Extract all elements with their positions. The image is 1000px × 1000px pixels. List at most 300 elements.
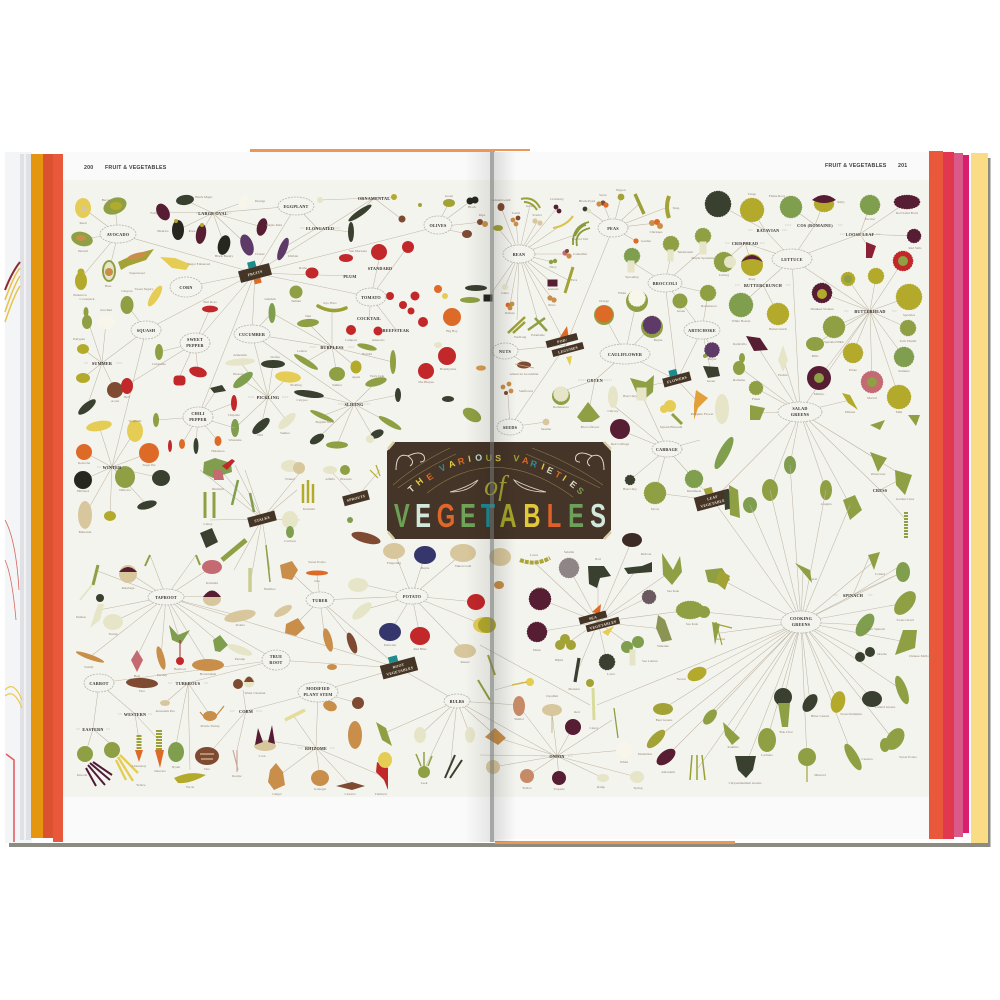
cluster: lettuce: [706, 192, 922, 414]
cluster: carrot and tuberous: Prairie Turnip: [201, 724, 220, 728]
cluster: cooking greens: GREENS: [792, 622, 811, 627]
cluster: squash: WINTER: [103, 465, 122, 470]
cluster: cucumber: Saki: [305, 314, 311, 318]
cluster: beans and peas: Anasazi: [548, 287, 559, 291]
banner: leaf vegetables: VEGETABLES: [700, 498, 728, 509]
cluster: salad greens: Endive: [778, 373, 788, 377]
cluster: flowers and cabbage: Savoy: [651, 507, 660, 511]
cluster: bulbs and onion: Spring: [633, 786, 643, 790]
cluster: flowers and cabbage: Broccoflower: [581, 425, 600, 429]
cluster: ornamental and olives: Ripe: [479, 213, 486, 217]
cluster: lettuce: Bibb: [812, 354, 819, 358]
left fore-edge pages: [5, 152, 32, 843]
cluster: cooking greens: Sweet Potato: [899, 755, 917, 759]
cluster: cucumber: Sumter: [280, 431, 291, 435]
cluster: ornamental and olives: ORNAMENTAL: [358, 196, 390, 201]
cluster: cucumber: Wautoma: [229, 438, 242, 442]
cluster: avocado: [70, 194, 136, 297]
cluster: tuber and potato: [272, 529, 495, 670]
cluster: lettuce: Buttercrunch: [769, 327, 787, 331]
cluster: corm and rhizome: Corn: [259, 754, 266, 758]
cluster: flowers and cabbage: Pumpkin Flower: [691, 412, 714, 416]
cluster: taproot: Rutabaga: [122, 586, 135, 590]
cluster: carrot and tuberous: [76, 650, 290, 789]
right page: [495, 152, 929, 839]
cluster: cucumber: PICKLING: [257, 395, 280, 400]
cluster: tomato: The Burpee: [418, 380, 434, 384]
cluster: tuber and potato: Peruvian: [384, 643, 396, 647]
cluster: nuts and seeds: [442, 285, 552, 435]
cluster: squash: Hubbard: [77, 489, 89, 493]
cluster: bulbs and onion: [376, 655, 644, 791]
main connector lines: roots, tubers, stalks: [93, 465, 590, 757]
cluster: broccoli, artichoke, cauliflower: [578, 229, 720, 383]
cluster: tomato: [299, 241, 461, 384]
cluster: broccoli, artichoke, cauliflower: CAULIFLOWER: [608, 352, 643, 357]
banner: root vegetables: [378, 651, 418, 679]
cluster: bulbs and onion: Shallot: [514, 717, 524, 721]
cluster: broccoli, artichoke, cauliflower: Sprouting: [625, 275, 639, 279]
cluster: cucumber: Gherkin: [264, 297, 276, 301]
cluster: taproot: Salsify: [84, 665, 94, 669]
title: vegetables: V: [394, 498, 410, 535]
cluster: beans and peas: [484, 188, 680, 339]
cluster: salad greens: SALAD: [792, 406, 808, 411]
cluster: cucumber: Sumter: [332, 383, 343, 387]
cluster: cooking greens: Bok Choi: [779, 730, 793, 734]
cluster: sea vegetables: Sea Kale: [667, 589, 680, 593]
cluster: squash: SUMMER: [92, 361, 113, 366]
cluster: avocado: Bacon: [102, 198, 111, 202]
cluster: bulbs and onion: ONION: [549, 754, 565, 759]
cluster: cooking greens: Sweet Pumpkin: [840, 712, 862, 716]
cluster: carrot and tuberous: Nyam: [172, 765, 181, 769]
cluster: corm and rhizome: Water Chestnut: [245, 691, 266, 695]
cluster: tuber and potato: Red Bliss: [413, 647, 427, 651]
title corner flourishes: [396, 453, 604, 492]
left page: [63, 152, 495, 842]
cluster: cooking greens: COOKING: [790, 616, 813, 621]
cluster: corm and rhizome: Konjac: [232, 774, 242, 778]
cluster: tomato: San Marzano: [349, 249, 367, 253]
cluster: nuts and seeds: SEEDS: [503, 425, 518, 430]
cluster: cucumber: [225, 286, 403, 449]
title: vegetables: E: [415, 498, 431, 535]
cluster: salad greens: GREENS: [791, 412, 810, 417]
title: the various varieties: T: [406, 483, 417, 494]
cluster: cooking greens: Collard Greens: [875, 705, 896, 709]
cluster: taproot: Horseradish: [200, 672, 216, 676]
title: vegetables: G: [437, 498, 455, 535]
banner: pod legumes: LEGUMES: [558, 346, 578, 355]
cluster: stalks: Kohlrabi: [303, 507, 315, 511]
title: the various varieties: A: [447, 458, 457, 470]
cluster: cucumber: SLICING: [344, 402, 364, 407]
cluster: cucumber: English Slicer: [315, 420, 335, 424]
cluster: sea vegetables: Laver: [607, 672, 616, 676]
cluster: corn: CORN: [179, 285, 193, 290]
title: vegetables: E: [460, 498, 476, 535]
cluster: peppers: [121, 300, 240, 454]
cluster: stalks: Rhubarb: [212, 487, 224, 491]
cluster: ornamental and olives: OLIVES: [429, 223, 447, 228]
cluster: taproot: Daikon: [76, 615, 86, 619]
cluster: sea vegetables: Laver: [530, 553, 539, 557]
cluster: tuber and potato: Fingerling: [387, 561, 401, 565]
cluster: stalks: Cardoon: [284, 539, 296, 543]
cluster: tuber and potato: Oca: [314, 579, 320, 583]
cluster: lettuce: Speckled Bibb: [824, 340, 844, 344]
cluster: corn: Sugar Enhanced: [188, 262, 210, 266]
cluster: corn: Supersweet: [129, 271, 145, 275]
cluster: carrot and tuberous: Jerusalem Pea: [155, 709, 175, 713]
cluster: corm and rhizome: MODIFIED: [306, 686, 330, 691]
cluster: eggplant: EGGPLANT: [283, 204, 309, 209]
cluster: bulbs and onion: Red: [574, 710, 580, 714]
cluster: taproot: Beetroot: [174, 667, 186, 671]
cluster: sea vegetables: Mozuku: [568, 687, 580, 691]
decorative arcs: [393, 448, 603, 497]
cluster: cucumber: Calypso: [296, 398, 308, 402]
cluster: eggplant: Purple Rain: [266, 223, 282, 227]
cluster: tomato: Brandywine: [440, 367, 457, 371]
cluster: cooking greens: Mustard: [814, 773, 826, 777]
cluster: lettuce: BUTTERHEAD: [854, 309, 886, 314]
cluster: lettuce: CRISPHEAD: [732, 241, 758, 246]
cluster: squash: Zucchini: [100, 308, 112, 312]
banner: pod legumes: [546, 326, 584, 366]
cluster: sea vegetables: Nori: [595, 557, 601, 561]
cluster: avocado: Reed: [80, 221, 87, 225]
title: the various varieties: E: [545, 465, 555, 476]
cluster: lettuce: LETTUCE: [781, 257, 803, 262]
cluster: lettuce: Drunken Woman: [810, 307, 834, 311]
cluster: cooking greens: Amaranth: [661, 770, 675, 774]
banner: flowers: [661, 366, 692, 387]
cluster: lettuce: BUTTERCRUNCH: [744, 283, 783, 288]
cluster: lettuce: Escolar: [865, 217, 876, 221]
cluster: lettuce: Pirate: [849, 368, 857, 372]
cluster: carrot and tuberous: Kuroda: [77, 773, 88, 777]
cluster: cucumber: Dill: [257, 433, 263, 437]
cluster: lettuce: Summer: [898, 369, 911, 373]
cluster: beans and peas: Garden: [641, 239, 651, 243]
cluster: sprouts: Alfalfa: [325, 477, 335, 481]
banner: root vegetables: ROOT: [392, 663, 405, 670]
cluster: eggplant: Ichiban: [288, 254, 298, 258]
cluster: lettuce: White Boston: [732, 319, 751, 323]
cluster: stalks: Celery: [203, 522, 213, 526]
cluster: squash: Pattypan: [73, 337, 85, 341]
cluster: taproot: Parsnip: [235, 657, 245, 661]
cluster: bulbs and onion: Yellow: [522, 786, 532, 790]
cluster: corm and rhizome: Taro: [204, 767, 210, 771]
cluster: broccoli, artichoke, cauliflower: Tenderstem: [677, 250, 693, 254]
cluster: nuts and seeds: NUTS: [499, 349, 511, 354]
cluster: squash: Acorn: [111, 399, 120, 403]
cluster: broccoli, artichoke, cauliflower: White: [618, 291, 627, 295]
cluster: cooking greens: Kokihia: [728, 745, 739, 749]
cluster: beans and peas: Fava: [571, 278, 578, 282]
cluster: corm and rhizome: Turmeric: [375, 792, 388, 796]
cluster: tuber and potato: Sweet Potato: [308, 560, 326, 564]
title: vegetables: T: [481, 498, 496, 535]
title: vegetables: L: [547, 498, 561, 535]
cluster: carrot and tuberous: TUBEROUS: [176, 681, 201, 686]
cluster: beans and peas: Black-Eyed: [579, 199, 595, 203]
cluster: cooking greens: Sorrel: [809, 577, 817, 581]
cluster: eggplant: Dourga: [255, 199, 266, 203]
right coloured edge bands: [929, 151, 988, 843]
title: the various varieties: S: [495, 453, 501, 463]
cluster: beans and peas: Yardlong: [514, 335, 527, 339]
main connector lines: legumes, flowers, greens: [505, 225, 880, 705]
cluster: tuber and potato: POTATO: [403, 594, 422, 599]
banner: sprouts: [342, 490, 370, 506]
cluster: ornamental and olives: [317, 194, 488, 238]
cluster: carrot and tuberous: CARROT: [89, 681, 109, 686]
cluster: bulbs and onion: Celery: [589, 726, 599, 730]
title: the various varieties: A: [521, 455, 530, 466]
cluster: beans and peas: Haricot Vert: [572, 237, 588, 241]
cluster: corn: Sweet Sugary: [135, 287, 154, 291]
cluster: nuts and seeds: Sunflower: [519, 389, 534, 393]
cluster: tomato: STANDARD: [368, 266, 392, 271]
cluster: flowers and cabbage: Bok Choy: [623, 487, 637, 491]
title: the various varieties: I: [467, 454, 472, 464]
cluster: corm and rhizome: Cassava: [344, 792, 356, 796]
cluster: cooking greens: Water Spinach: [865, 627, 885, 631]
cluster: beans and peas: Lentil: [512, 211, 520, 215]
cluster: salad greens: CRESS: [873, 488, 888, 493]
title: the various varieties: I: [540, 461, 546, 472]
title: vegetables: E: [568, 498, 584, 535]
cluster: avocado: Hass: [105, 284, 112, 288]
cluster: squash: [73, 289, 170, 534]
cluster: cooking greens: [638, 465, 932, 785]
cluster: eggplant: [150, 194, 354, 262]
cluster: bulbs and onion: White: [620, 760, 629, 764]
cluster: lettuce: Rosy: [749, 277, 756, 281]
cluster: tomato: BEEFSTEAK: [383, 328, 410, 333]
cluster: peppers: PEPPER: [189, 417, 208, 422]
cluster: eggplant: Black Beauty: [215, 254, 233, 258]
cluster: fruits banner: FRUITS: [247, 270, 263, 277]
cluster: lettuce: Red Sails: [909, 246, 922, 250]
cluster: cooking greens: Bitter Greens: [811, 714, 830, 718]
cluster: tomato: Amaretto: [372, 338, 385, 342]
cluster: beans and peas: PEAS: [607, 226, 619, 231]
cluster: fruits banner: [236, 257, 273, 288]
cluster: beans and peas: BEAN: [513, 252, 525, 257]
cluster: beans and peas: Snow: [599, 193, 607, 197]
cluster: tuber and potato: TUBER: [312, 598, 328, 603]
cluster: squash: Butternut: [79, 530, 91, 534]
cluster: ornamental and olives: Black: [468, 205, 476, 209]
cluster: corm and rhizome: CORM: [239, 709, 253, 714]
cluster: peppers: SWEET: [187, 337, 203, 342]
cluster: tomato: COCKTAIL: [357, 316, 381, 321]
panel: title plaque: [387, 442, 611, 539]
cluster: broccoli, artichoke, cauliflower: ARTICHOKE: [688, 328, 716, 333]
cluster: cucumber: Vertina: [270, 355, 280, 359]
cluster: carrot and tuberous: Taro: [139, 689, 145, 693]
title: vegetables: A: [499, 498, 517, 535]
title: the various varieties: R: [457, 455, 466, 467]
cluster: eggplant: LARGE OVAL: [198, 211, 228, 216]
cluster: carrot and tuberous: WESTERN: [124, 712, 146, 717]
cluster: eggplant: ELONGATED: [306, 226, 334, 231]
cluster: lettuce: Flame Rosy: [769, 194, 785, 198]
banner: root vegetables: VEGETABLES: [386, 666, 414, 677]
page header right: 201: [898, 163, 907, 169]
cluster: squash: Crookneck: [80, 297, 95, 301]
cluster: tomato: Roma: [299, 266, 308, 270]
cluster: lettuce: Tango: [748, 192, 757, 196]
cluster: cooking greens: Beet Greens: [656, 718, 673, 722]
title: the various varieties: V: [513, 453, 520, 464]
cluster: beans and peas: Edamame: [531, 333, 545, 337]
title: of: of: [484, 471, 509, 502]
cluster: taproot: Parsley: [157, 673, 167, 677]
cluster: cucumber: Pickling: [290, 383, 302, 387]
cluster: beans and peas: Adzuki Lentil: [492, 198, 511, 202]
title: the various varieties: I: [561, 473, 568, 483]
cluster: beans and peas: Pigeon: [616, 188, 626, 192]
cluster: cooking greens: Cassava: [861, 757, 873, 761]
cluster: sea vegetables: Ricbote: [641, 552, 652, 556]
cluster: lettuce: LOOSE LEAF: [846, 232, 875, 237]
cluster: sprouts: Brussels: [340, 477, 352, 481]
cluster: sea vegetables: Sea Lettuce: [642, 659, 658, 663]
cluster: lettuce: Iceberg: [719, 273, 729, 277]
cluster: cooking greens: Chrysanthemum Greens: [729, 781, 762, 785]
title: the various varieties: E: [425, 471, 435, 483]
cluster: cucumber: Armenian: [233, 353, 247, 357]
title: the various varieties: V: [438, 462, 447, 474]
cluster: peppers: Bell Rosa: [203, 300, 217, 304]
cluster: cooking greens: Chinese Mallow: [909, 654, 932, 658]
cluster: flowers and cabbage: Drumhead: [687, 489, 701, 493]
cluster: broccoli, artichoke, cauliflower: Purple Sprouting: [691, 256, 715, 260]
cluster: tuber and potato: Purple: [421, 566, 430, 570]
cluster: broccoli, artichoke, cauliflower: Green: [677, 309, 685, 313]
cluster: bulbs and onion: BULBS: [450, 699, 465, 704]
cluster: cucumber: Lemon: [297, 349, 307, 353]
cluster: cooking greens: Orache: [877, 652, 887, 656]
cluster: corm and rhizome: [195, 676, 388, 796]
cluster: cucumber: BURPLESS: [320, 345, 344, 350]
cluster: beans and peas: Cranberry: [550, 197, 564, 201]
cluster: tomato: Campari: [345, 338, 357, 342]
cluster: beans and peas: Scarlet: [532, 213, 542, 217]
cluster: nuts and seeds: American Groundnut: [510, 372, 539, 376]
cluster: beans and peas: Snap: [673, 206, 680, 210]
cluster: flowers and cabbage: CABBAGE: [656, 447, 678, 452]
left coloured edge bands: [31, 154, 64, 842]
cluster: bulbs and onion: Ramp: [597, 785, 605, 789]
cluster: cooking greens: Dandelion: [638, 752, 652, 756]
cluster: eggplant: Fairy: [150, 211, 158, 215]
cluster: broccoli, artichoke, cauliflower: Orange: [599, 299, 609, 303]
cluster: squash: Delicata: [119, 488, 131, 492]
cluster: peppers: CHILI: [191, 411, 205, 416]
cluster: corm and rhizome: Ginger: [272, 792, 283, 796]
cluster: flowers and cabbage: Bok Choy: [623, 394, 637, 398]
cluster: sea vegetables: Wakame: [657, 644, 669, 648]
cluster: peppers: Habanero: [211, 449, 225, 453]
cluster: broccoli, artichoke, cauliflower: Green: [707, 379, 715, 383]
cluster: flowers and cabbage: Chicory: [608, 409, 619, 413]
cluster: flowers and cabbage: Squash Blossom: [660, 425, 683, 429]
cluster: cooking greens: Sarepta: [715, 637, 726, 641]
banner: leaf vegetables: [692, 483, 732, 511]
cluster: taproot: Beet: [134, 674, 140, 678]
cluster: salad greens: Frisée: [752, 397, 761, 401]
page header left: FRUIT & VEGETABLES: [105, 165, 167, 171]
cluster: taproot: TAPROOT: [155, 595, 177, 600]
banner: flowers: FLOWERS: [667, 375, 687, 385]
title: the various varieties: S: [575, 485, 586, 497]
cluster: carrot and tuberous: Yellow: [136, 783, 146, 787]
cluster: bulbs and onion: Leek: [421, 781, 428, 785]
cluster: carrot and tuberous: EASTERN: [82, 727, 104, 732]
main connector lines: fruits: [118, 198, 436, 417]
cluster: salad greens: Mizuna: [845, 410, 856, 414]
cluster: lettuce: Mindeo: [814, 392, 825, 396]
cluster: lettuce: Mini: [896, 410, 902, 414]
page header left: 200: [84, 165, 93, 171]
cluster: salad greens: Arugula: [820, 502, 832, 506]
cluster: carrot and tuberous: Chantenay: [132, 764, 147, 768]
cluster: taproot: Turnip: [108, 632, 118, 636]
cluster: beans and peas: Cannellini: [573, 252, 587, 256]
cluster: lettuce: COS (ROMAINE): [797, 223, 833, 228]
cluster: salad greens: Romaine: [733, 378, 746, 382]
spine shadow: [465, 152, 516, 842]
banner: pod legumes: POD/: [557, 338, 568, 344]
cluster: salad greens: [724, 336, 920, 538]
cluster: cucumber: Tamaki: [291, 299, 301, 303]
cluster: carrot and tuberous: TRUE: [270, 654, 282, 659]
cluster: sea vegetables: Sea Kale: [686, 622, 699, 626]
banner: sea vegetables: SEA: [589, 615, 597, 621]
cluster: cucumber: Kyo Hato: [323, 301, 337, 305]
cluster: corm and rhizome: Galangal: [314, 787, 326, 791]
cluster: avocado: Sharwil: [78, 249, 88, 253]
cluster: broccoli, artichoke, cauliflower: Romanesco: [701, 304, 717, 308]
cluster: ornamental and olives: Green: [445, 194, 453, 198]
cluster: carrot and tuberous: ROOT: [269, 660, 283, 665]
cluster: lettuce: BATAVIAN: [757, 228, 779, 233]
cluster: lettuce: Speckles: [903, 313, 916, 317]
cluster: peppers: PEPPER: [186, 343, 205, 348]
cluster: broccoli, artichoke, cauliflower: GREEN: [587, 378, 603, 383]
cluster: peppers: Bell: [124, 395, 130, 399]
banner: sprouts: SPROUTS: [346, 494, 366, 503]
title: the various varieties: H: [414, 476, 425, 488]
cluster: sea vegetables: Sabelin: [564, 550, 574, 554]
cluster: cucumber: Boston: [233, 372, 243, 376]
cluster: stalks: Fennel: [285, 477, 295, 481]
cluster: lettuce: Tom Thumb: [900, 339, 917, 343]
banner: sea vegetables: [578, 604, 620, 636]
cluster: tomato: PLUM: [343, 274, 357, 279]
cluster: cucumber: Apple: [352, 375, 361, 379]
title: vegetables: B: [523, 498, 541, 535]
cluster: avocado: AVOCADO: [107, 232, 130, 237]
cluster: stalks: Bamboo: [264, 587, 276, 591]
